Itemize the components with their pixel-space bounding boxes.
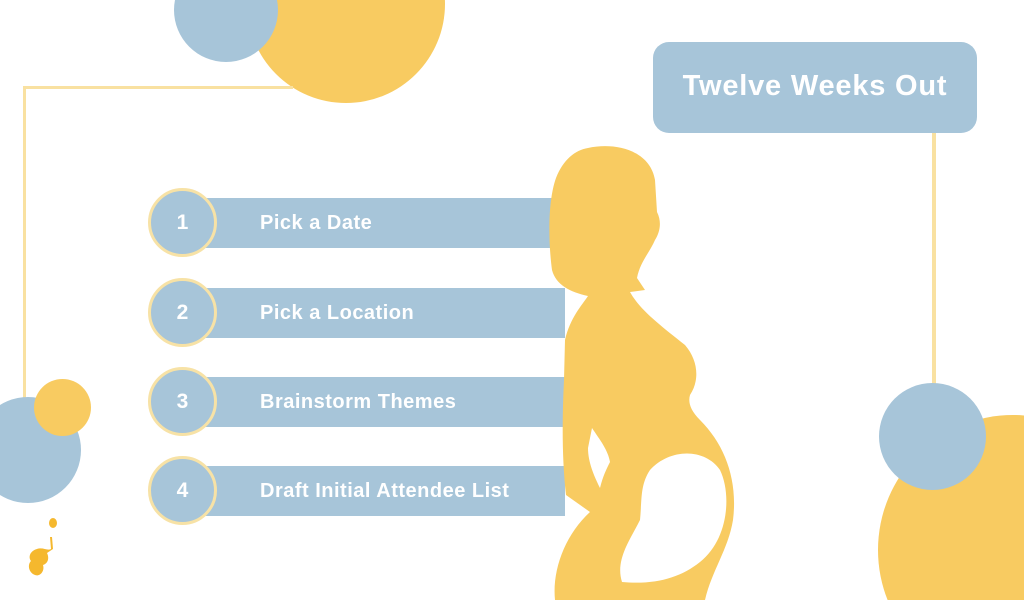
title box <box>653 42 977 133</box>
step 1: Pick a Date <box>260 212 372 234</box>
step 4: Draft Initial Attendee List <box>260 480 509 502</box>
illustration: pregnant woman silhouette <box>549 146 734 600</box>
step 4 <box>148 456 565 525</box>
decoration: right circles <box>878 383 1024 600</box>
icon: logo elephant <box>28 518 57 576</box>
step 2: Pick a Location <box>260 302 414 324</box>
title box: Twelve Weeks Out <box>683 70 947 102</box>
step 3 <box>148 367 564 436</box>
step 3: 3 <box>177 390 188 413</box>
step 2 <box>148 278 565 347</box>
decoration: top circles <box>174 0 445 103</box>
step 1: 1 <box>177 211 188 234</box>
belly cutout <box>620 454 726 583</box>
connector line right <box>932 130 936 390</box>
connector line left <box>23 86 293 398</box>
arm gap <box>588 428 610 488</box>
step 3: Brainstorm Themes <box>260 391 456 413</box>
step 1 <box>148 188 552 257</box>
decoration: left circles <box>0 379 91 503</box>
step 2: 2 <box>177 301 188 324</box>
step 4: 4 <box>177 479 188 502</box>
